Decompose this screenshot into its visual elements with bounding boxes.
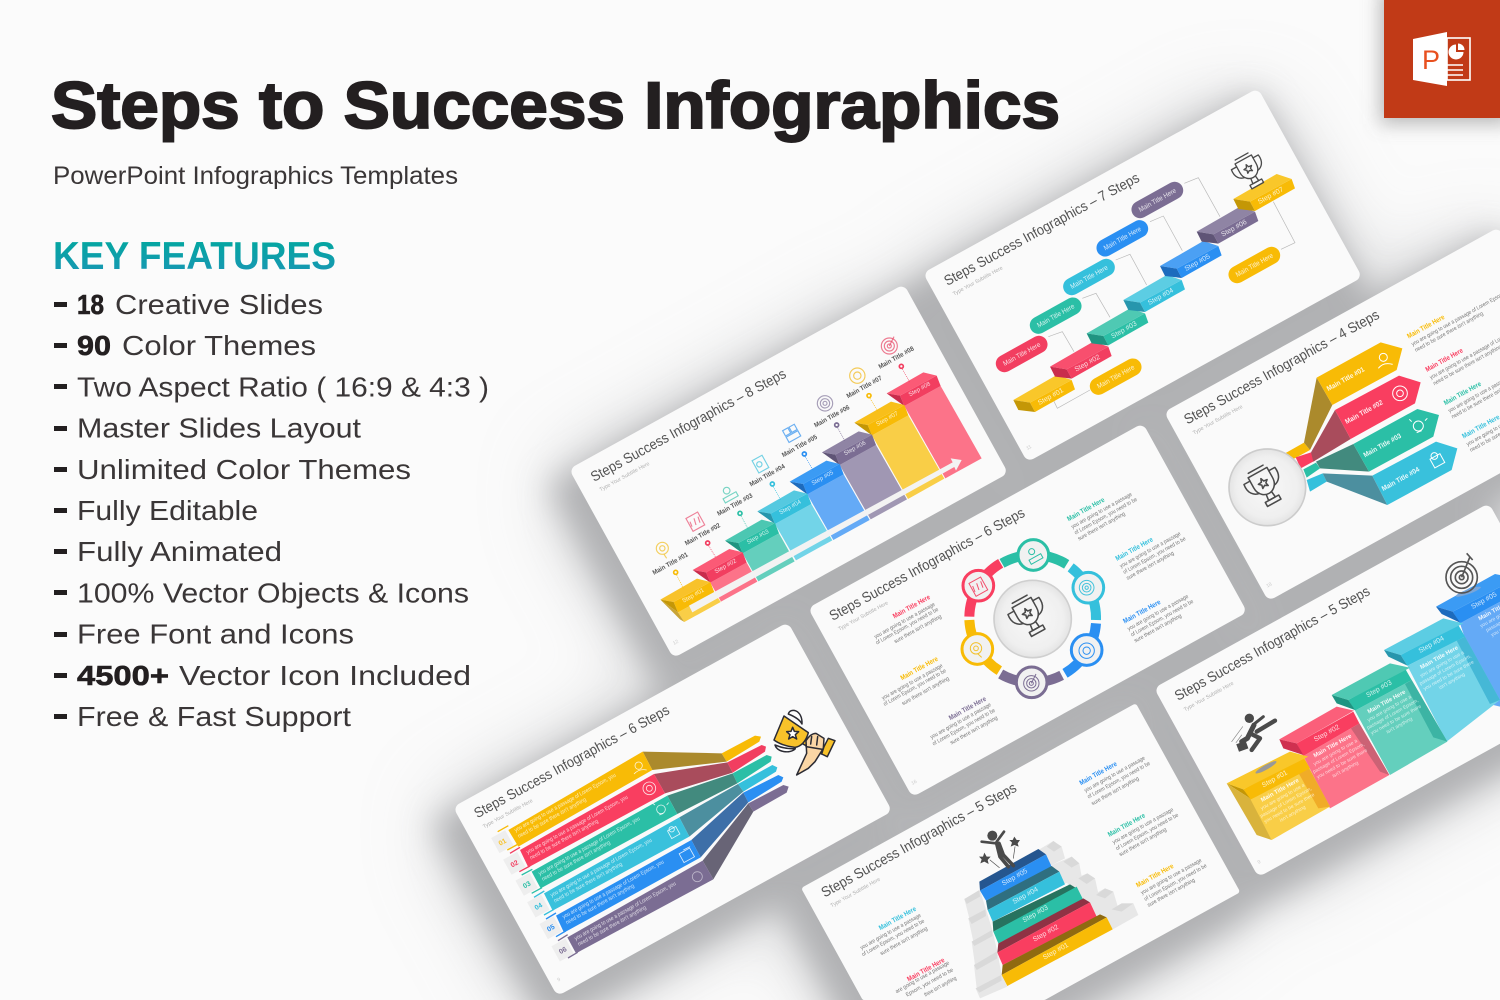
text blocks: of Lorem Epsom, you need to be: [883, 668, 947, 708]
box text: you need to be sure there: [1263, 792, 1316, 825]
text blocks: Main Title Here: [1079, 761, 1118, 787]
step labels: Step #05: [811, 470, 835, 487]
text blocks: sure there isn't anything: [1091, 776, 1140, 807]
stair labels: Step #01: [1042, 942, 1070, 962]
stair labels: Step #04: [1012, 886, 1040, 906]
feature: 4500+ icons: [54, 660, 471, 691]
step labels: Step #04: [1147, 287, 1175, 307]
step labels: [1037, 186, 1285, 407]
connector lines: [1048, 178, 1295, 408]
box steps: [1227, 574, 1500, 840]
panel: 5 steps stairs slide: [805, 707, 1236, 998]
step labels: Step #03: [1110, 320, 1138, 340]
text blocks: Main Title Here: [1122, 599, 1162, 625]
slide title: Steps Success Infographics – 5 Steps: [1172, 584, 1373, 704]
icon: trophy: [1228, 149, 1271, 193]
step labels: Step #01: [1037, 387, 1065, 407]
main title labels: Main Title #03: [716, 492, 754, 518]
stair labels: Step #05: [1001, 868, 1029, 888]
colored stairs: [979, 849, 1113, 986]
number boxes: 05: [546, 924, 556, 934]
title pills: Main Title Here: [1069, 265, 1109, 291]
page number: 12: [672, 639, 680, 647]
icon: center trophy: [1240, 461, 1290, 511]
arrow strip: [689, 458, 962, 612]
box text: passage of Lorem Epsom,: [1366, 698, 1420, 731]
slide title: Steps Success Infographics – 8 Steps: [588, 366, 789, 486]
slide title: Steps Success Infographics – 6 Steps: [472, 702, 672, 822]
text blocks: of Lorem Epsom, you need to be: [932, 708, 996, 747]
bar text: need to be sure there isn't anything: [565, 883, 636, 926]
feature: master slides: Master Slides Layout: [77, 412, 361, 444]
icon shadow: [1254, 759, 1278, 775]
text blocks: you are going to use a passage: [1083, 756, 1146, 794]
slide title: Steps Success Infographics – 5 Steps: [819, 780, 1020, 901]
title pills: Main Title Here: [1036, 303, 1076, 330]
text blocks: [859, 756, 1208, 998]
text blocks: you are going to use a passage: [1119, 531, 1182, 570]
text blocks: Main Title Here: [1135, 863, 1175, 889]
bar icons: [634, 762, 702, 882]
box text: [1259, 591, 1500, 825]
page number: 16: [910, 779, 918, 787]
number boxes: 03: [522, 880, 532, 890]
text blocks: you are going to use a passage: [1070, 492, 1133, 530]
feature: editable: Fully Editable: [77, 495, 258, 526]
number boxes: 01: [498, 838, 508, 848]
panel: 5 steps boxes slide: [1154, 503, 1500, 877]
box text: you are going to use a: [1260, 782, 1306, 812]
title pills: Main Title Here: [1002, 342, 1042, 368]
slide subtitle: Type Your Subtitle Here: [952, 265, 1004, 297]
icon: winner figure: [979, 831, 1020, 868]
badge shadow: [1380, 0, 1500, 124]
text blocks: Main Title Here: [1066, 497, 1106, 523]
text blocks: need to be sure there isn't anything: [1414, 311, 1485, 354]
title pills: Main Title Here: [1103, 226, 1143, 252]
text blocks: Main Title Here: [1115, 536, 1154, 563]
bar text: need to be sure there isn't anything: [541, 840, 612, 883]
text blocks: sure there isn't anything: [901, 676, 951, 707]
text blocks: you are going to use a passage: [929, 702, 992, 741]
text blocks: you are going to use a passage: [1112, 807, 1175, 846]
arrow labels: Main Title #02: [1344, 399, 1384, 426]
feature: free font: Free Font and Icons: [77, 618, 354, 650]
step labels: Step #04: [779, 499, 803, 516]
step labels: Step #03: [746, 529, 771, 546]
feature: support: Free & Fast Support: [77, 701, 351, 732]
icon: center trophy: [1004, 591, 1054, 641]
text blocks: of Lorem Epsom, you need to be: [1130, 599, 1195, 638]
text blocks: sure there isn't anything: [949, 715, 999, 746]
box text: Step #04: [1418, 635, 1446, 655]
arrow labels: Main Title #03: [1363, 433, 1403, 459]
text blocks: Main Title Here: [878, 906, 918, 932]
text blocks: sure there isn't anything: [879, 926, 929, 957]
pins: [674, 364, 910, 588]
feature: 18 creative slides: Creative Slides: [115, 289, 323, 320]
box text: isn't anything: [1385, 716, 1414, 735]
text blocks: are going to use a passage: [895, 960, 951, 995]
arrow labels: Main Title #01: [1326, 366, 1366, 393]
text blocks: Main Title Here: [1107, 812, 1147, 839]
text blocks: of Lorem Epsom, you need to be: [1122, 536, 1187, 576]
center disc: [994, 580, 1071, 658]
stair labels: Step #03: [1022, 904, 1050, 924]
slide subtitle: Type Your Subtitle Here: [1192, 404, 1244, 436]
title pills: Main Title Here: [1138, 188, 1178, 214]
box text: passage of Lorem Epsom,: [1312, 742, 1366, 775]
feature: unlimited themes: Unlimited Color Themes: [77, 454, 411, 485]
staircase chart: [660, 372, 982, 622]
slide title: Steps Success Infographics – 6 Steps: [827, 505, 1028, 625]
gray side stairs: [964, 841, 1138, 998]
text blocks: Main Title Here: [900, 656, 939, 682]
text blocks: Epsom, you need to be: [905, 967, 955, 998]
bar text: need to be sure there isn't anything: [529, 819, 600, 861]
number boxes: 06: [558, 946, 568, 956]
box text: Main Title Here: [1260, 778, 1301, 804]
text blocks: of Lorem Epsom, you need to be: [875, 607, 940, 646]
number boxes: 04: [534, 902, 544, 912]
panel: 4 steps slide: [1164, 227, 1500, 601]
slide subtitle: Type Your Subtitle Here: [837, 600, 889, 632]
text blocks: you are going to use a passage: [873, 602, 936, 640]
box text: isn't anything: [1438, 672, 1466, 691]
panel: 7 steps slide: [923, 88, 1362, 462]
box text: passage of Lorem Epsom,: [1259, 786, 1313, 820]
step labels: [682, 381, 932, 605]
text blocks: sure there isn't anything: [1133, 613, 1183, 644]
text blocks: Main Title Here: [948, 696, 988, 722]
text blocks: you are going to use a passage: [1140, 858, 1203, 896]
main title labels: Main Title #01: [652, 551, 690, 577]
bar text: you are going to use a passage of Lorem Epsom, you: [550, 838, 653, 899]
panel: 6 steps arrows slide: [453, 622, 892, 996]
text blocks: sure there isn't anything: [1147, 878, 1196, 909]
ring nodes: [962, 540, 1104, 698]
box text: you need to be sure there: [1423, 659, 1475, 692]
step labels: Step #02: [714, 558, 738, 575]
step labels: Step #07: [876, 411, 900, 428]
slide title: Steps Success Infographics – 7 Steps: [942, 170, 1142, 290]
text blocks: [873, 492, 1195, 747]
feature: animated: Fully Animated: [77, 536, 282, 567]
arrow labels: [1326, 366, 1421, 493]
text blocks: sure there isn't anything: [1118, 827, 1168, 858]
feature: 90 color themes: Color Themes: [122, 330, 316, 361]
text blocks: sure there isn't anything: [1126, 551, 1175, 582]
icon: target: [1446, 553, 1482, 598]
title pills: [993, 179, 1283, 398]
main title labels: Main Title #08: [878, 345, 916, 371]
text blocks: [1406, 287, 1500, 454]
center disc: [1229, 449, 1306, 526]
bar text: [514, 773, 677, 948]
slide subtitle: Type Your Subtitle Here: [830, 877, 882, 909]
box text: isn't anything: [1279, 804, 1307, 824]
ribbon bars: [508, 736, 789, 953]
panel: 6 steps circle slide: [808, 423, 1247, 797]
feature: 90 color themes: 90: [77, 330, 111, 361]
slide subtitle: Type Your Subtitle Here: [1183, 681, 1235, 713]
text blocks: Main Title Here: [906, 957, 946, 983]
box text: Main Title Here: [1367, 689, 1407, 715]
bar tabs: [498, 826, 578, 958]
feature: 18 creative slides: 18: [77, 289, 104, 320]
panel: 8 steps slide: [569, 284, 1008, 658]
box text: you are going to use a: [1419, 650, 1465, 679]
main title labels: Main Title #04: [749, 463, 787, 488]
page number: 9: [556, 977, 562, 983]
text blocks: Main Title Here: [1425, 347, 1464, 374]
box text: Main Title Here: [1313, 733, 1353, 759]
number boxes: 02: [510, 859, 520, 869]
box text: Step #02: [1313, 724, 1341, 744]
text blocks: of Lorem Epsom, you need to be: [861, 919, 926, 958]
step labels: Step #06: [843, 440, 868, 457]
slide title: Steps Success Infographics – 4 Steps: [1182, 307, 1382, 428]
feature: 4500+ icons: 4500+: [77, 660, 169, 691]
bar text: you are going to use a passage of Lorem Epsom, you: [538, 816, 641, 877]
key features heading: KEY FEATURES: [53, 235, 336, 278]
bar text: need to be sure there isn't anything: [517, 797, 588, 840]
bar text: you are going to use a passage of Lorem Epsom, you: [574, 881, 677, 942]
text blocks: you are going to use a passage: [881, 663, 944, 702]
step labels: Step #07: [1257, 186, 1285, 206]
text blocks: sure there isn't anything: [893, 614, 943, 645]
feature: 4500+ icons: Vector Icon Included: [179, 660, 471, 691]
key features list: [54, 289, 489, 732]
text blocks: of Lorem Epsom, you need to be: [1115, 813, 1180, 852]
text blocks: you are going to use a passage: [859, 913, 922, 951]
ring segments: [969, 555, 1096, 682]
title: Steps to Success Infographics: [51, 68, 1060, 142]
step labels: Step #08: [908, 381, 932, 398]
box text: you need to be sure there: [1316, 748, 1369, 781]
text blocks: of Lorem Epsom, you need to be: [1074, 497, 1138, 536]
node icons: [969, 549, 1094, 691]
slide subtitle: Type Your Subtitle Here: [482, 798, 534, 830]
text blocks: of Lorem Epsom, you need to be: [1143, 863, 1208, 903]
main title labels: Main Title #02: [684, 522, 722, 547]
feature: 90 color themes: [54, 330, 316, 361]
stair labels: [1001, 868, 1070, 962]
page number: 18: [1265, 581, 1273, 589]
step labels: Step #06: [1220, 219, 1248, 239]
arrow icons: [1378, 353, 1445, 468]
text blocks: you are going to use a passage: [1127, 594, 1190, 632]
box text: you are going to use a: [1312, 738, 1359, 767]
box text: Step #01: [1261, 769, 1289, 789]
box text: passage of Lorem Epsom,: [1419, 653, 1472, 687]
stair labels: Step #02: [1032, 924, 1060, 944]
box text: Step #03: [1365, 679, 1393, 699]
bar text: you are going to use a passage of Lorem Epsom, you: [526, 795, 629, 856]
bar text: need to be sure there isn't anything: [553, 862, 624, 904]
fanned arrows: [1285, 342, 1457, 505]
page number: 11: [1025, 444, 1033, 452]
bar text: need to be sure there isn't anything: [577, 905, 648, 948]
text blocks: of Lorem Epsom, you need to be: [1087, 761, 1151, 800]
text blocks: Main Title Here: [892, 594, 932, 620]
main title labels: Main Title #05: [781, 434, 819, 459]
main title labels: Main Title #06: [813, 404, 851, 429]
icon: kicking businessman: [1232, 714, 1275, 752]
text blocks: sure there isn't anything: [1077, 511, 1127, 542]
subtitle: PowerPoint Infographics Templates: [53, 162, 458, 190]
arrow labels: Main Title #04: [1381, 466, 1421, 493]
step labels: Step #01: [682, 587, 706, 605]
icon: PowerPoint logo: P: [1422, 45, 1440, 75]
box text: Main Title Here: [1419, 645, 1460, 671]
page number: 9: [1257, 859, 1262, 866]
slide subtitle: Type Your Subtitle Here: [599, 461, 651, 493]
title pills: Main Title Here: [1096, 364, 1136, 391]
panel: PowerPoint badge: [1384, 0, 1500, 118]
number boxes: [491, 830, 574, 961]
box text: isn't anything: [1331, 760, 1360, 779]
main title labels: Main Title #07: [846, 375, 884, 400]
bar text: you are going to use a passage of Lorem Epsom, you: [514, 773, 617, 834]
text blocks: there isn't anything: [923, 976, 958, 998]
title pills: Main Title Here: [1235, 253, 1275, 279]
main title labels: [652, 345, 916, 577]
box text: Step #05: [1470, 591, 1498, 611]
icon: colored trophy with hand: [774, 710, 835, 775]
feature: aspect ratio: Two Aspect Ratio ( 16:9 & 4:3 ): [77, 372, 489, 402]
step labels: Step #02: [1074, 354, 1102, 374]
box text: you need to be sure there: [1370, 704, 1423, 737]
step labels: Step #05: [1184, 253, 1212, 273]
isometric steps: [1013, 174, 1295, 412]
bar text: you are going to use a passage of Lorem Epsom, you: [562, 859, 665, 920]
step icons: [656, 337, 897, 558]
feature: vector objects: 100% Vector Objects & Icons: [77, 578, 469, 608]
text blocks: Main Title Here: [1406, 314, 1446, 340]
text blocks: Main Title Here: [1443, 381, 1483, 407]
box text: you are going to use a: [1366, 694, 1413, 723]
